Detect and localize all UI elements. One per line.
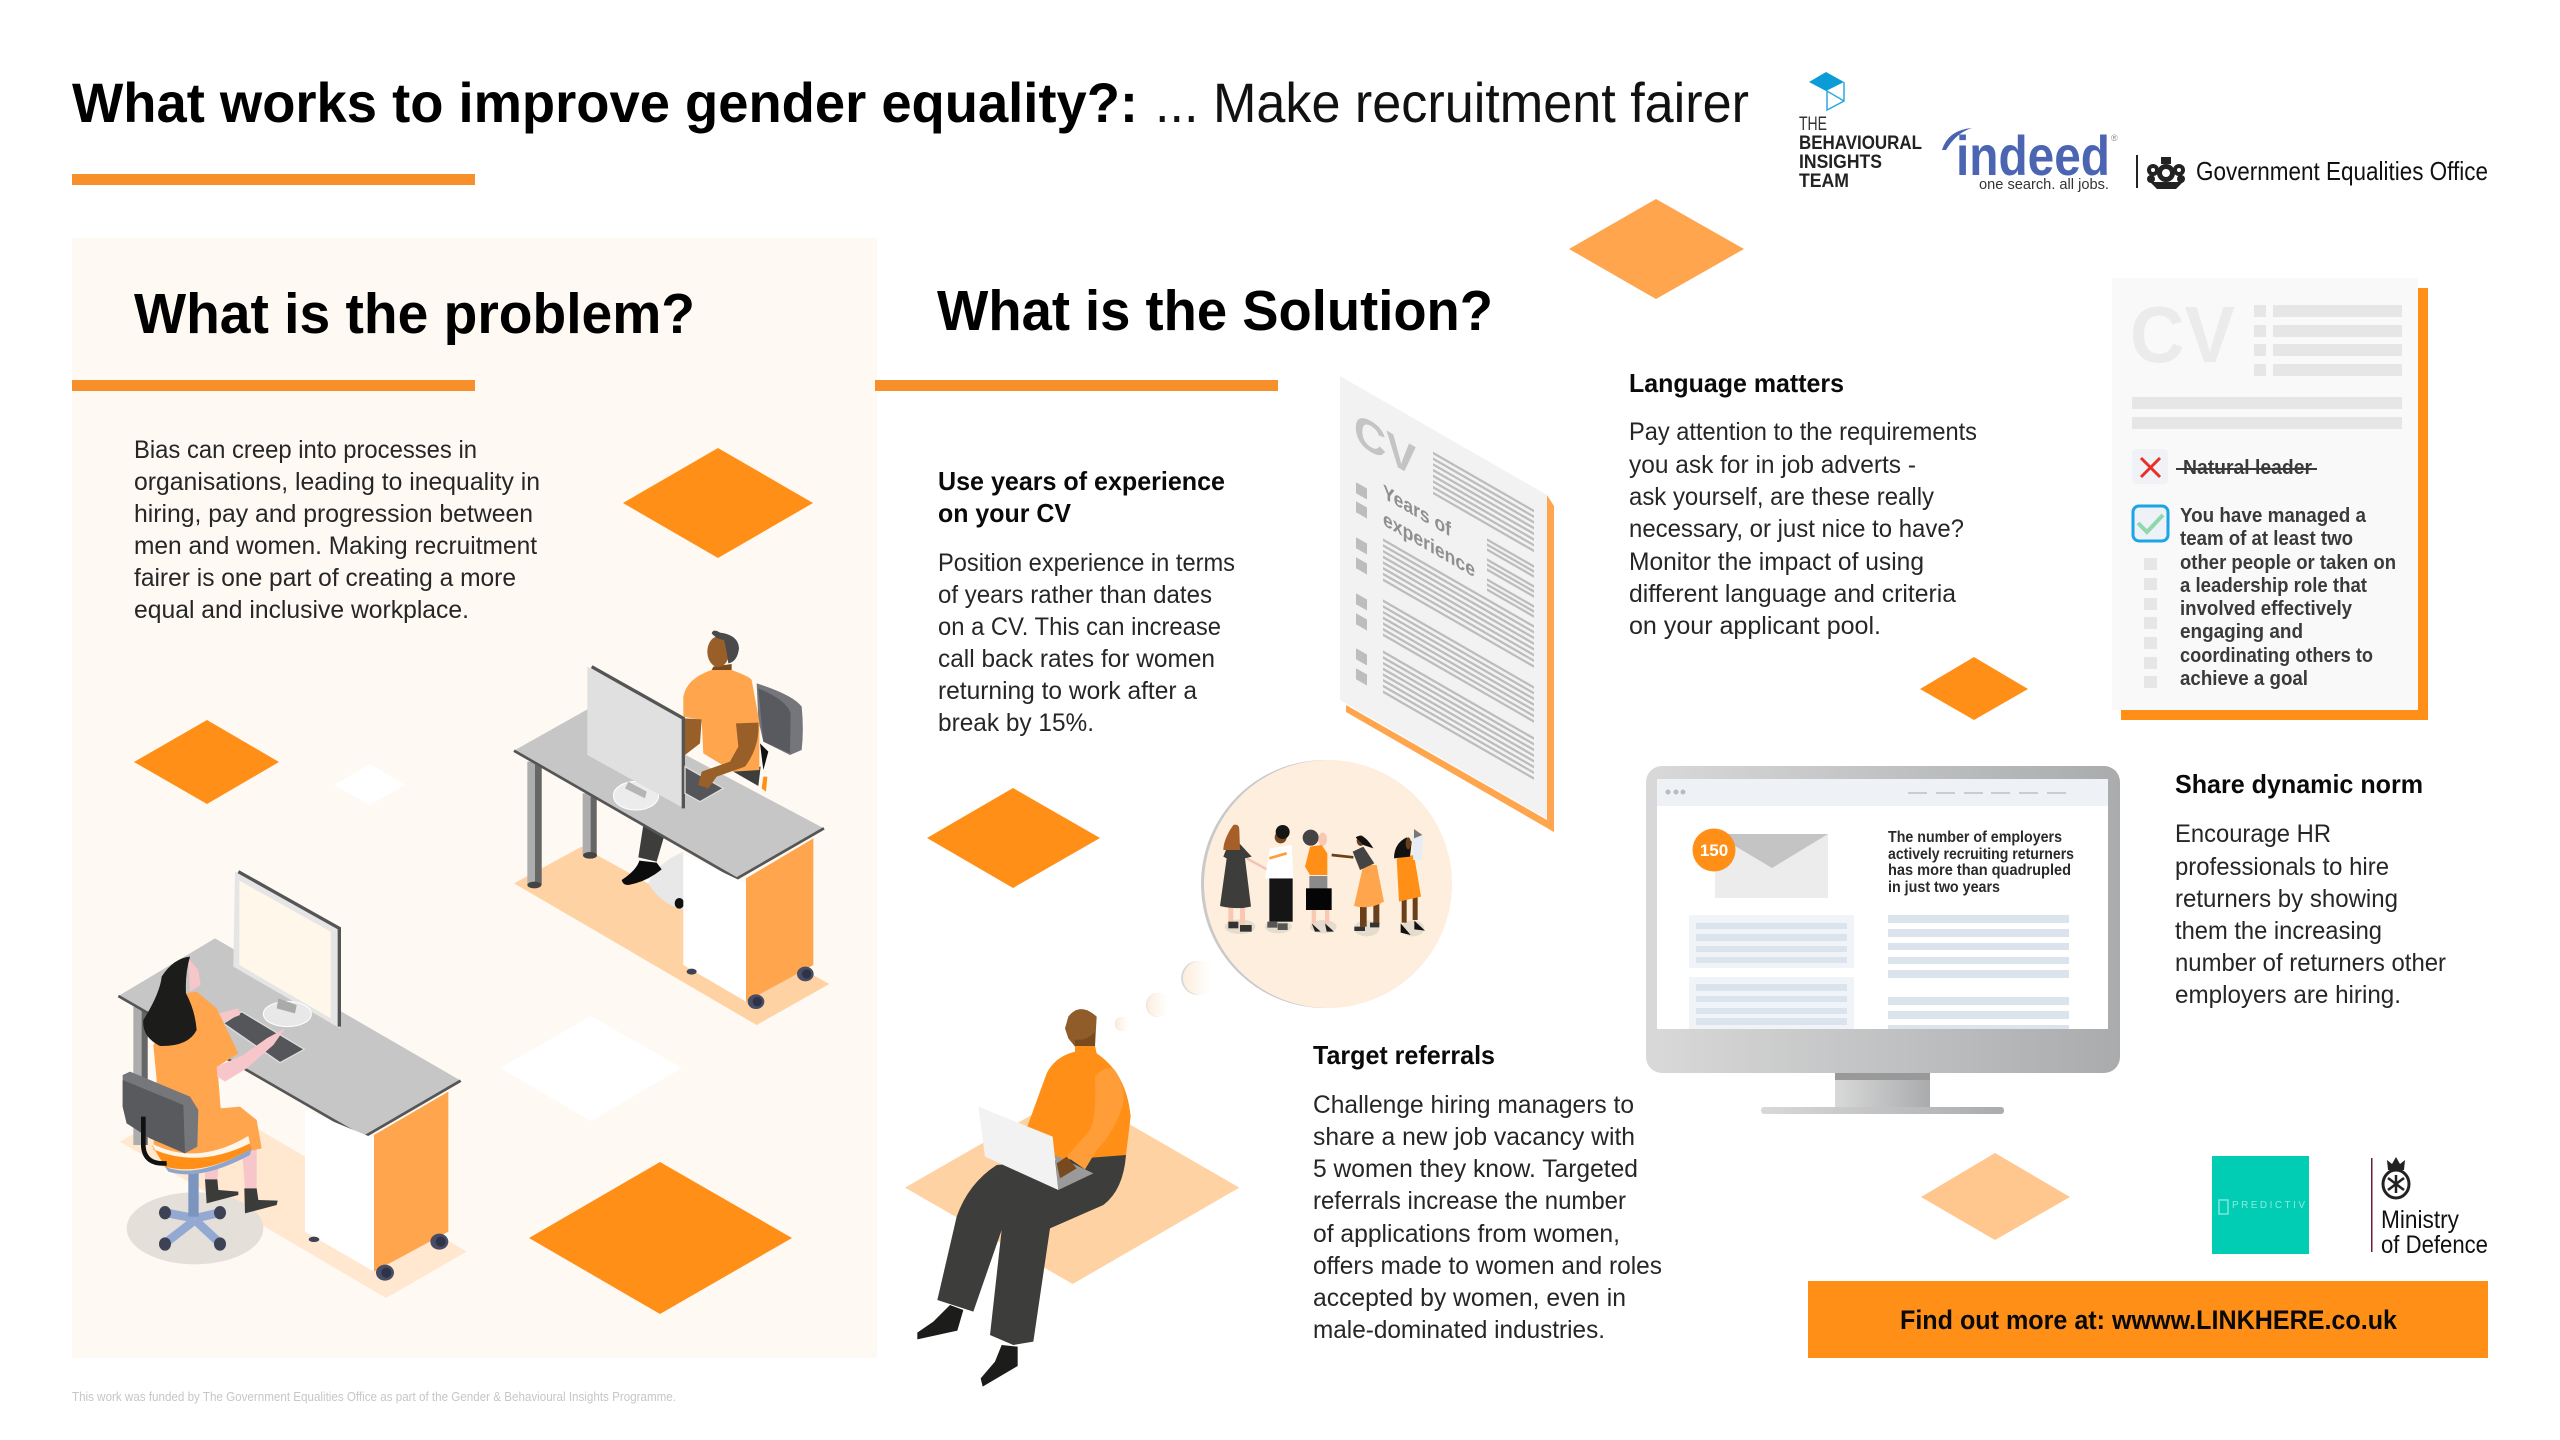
diamond: pale orange bottom [1921,1153,2070,1240]
people group [1220,825,1425,936]
text: preferred requirement: team of at least two [2180,528,2353,550]
text: preferred requirement [2180,505,2396,690]
diamond: orange top [623,448,813,558]
text: language matters [1629,368,1977,640]
logo: Ministry of Defence: Ministry [2381,1206,2459,1234]
text: preferred requirement: coordinating others to [2180,645,2373,667]
text: target referrals: share a new job vacancy with [1313,1123,1635,1151]
logo: indeed: one search. all jobs. [1979,176,2109,193]
text: employers statistic: in just two years [1888,879,2000,896]
icon: envelope with badge: 150 [1700,841,1728,860]
text: language matters: on your applicant pool. [1629,612,1881,640]
illustration: isometric CV [1340,376,1554,832]
logo: The Behavioural Insights Team [1799,72,1922,192]
text: employers statistic [1888,829,2074,896]
logo: The Behavioural Insights Team: INSIGHTS [1799,152,1882,173]
diamond: big orange [529,1162,792,1314]
logo: indeed: indeed [1956,124,2110,187]
icon: red cross [2132,449,2168,484]
text: target referrals: Target referrals [1313,1040,1495,1070]
text: language matters: you ask for in job adverts - [1629,451,1916,479]
text: language matters: Language matters [1629,368,1844,398]
text: target referrals: accepted by women, even in [1313,1284,1626,1312]
text: target referrals [1313,1040,1662,1344]
icon: green tick [2133,506,2168,541]
logo: The Behavioural Insights Team: BEHAVIOURAL [1799,133,1922,154]
logo: The Behavioural Insights Team: TEAM [1799,171,1849,192]
text: share dynamic norm [2175,769,2446,1009]
thought bubble: group of people [1201,760,1452,1008]
diamond: orange left [134,720,279,804]
text: share dynamic norm: returners by showing [2175,885,2398,913]
title: What works to improve gender equality?: [72,71,1138,134]
text: target referrals: offers made to women and roles [1313,1252,1662,1280]
text: target referrals: male-dominated industries. [1313,1316,1605,1344]
icon: envelope with badge [1692,828,1828,898]
diamond: small white [334,764,405,805]
text: employers statistic: has more than quadrupled [1888,862,2071,879]
text: preferred requirement: achieve a goal [2180,668,2308,690]
illustration: isometric CV: experience [1383,506,1475,582]
text: language matters: ask yourself, are these really [1629,483,1934,511]
text: use years of experience: of years rather than dates [938,581,1212,609]
text: employers statistic: actively recruiting returners [1888,846,2074,863]
diamond: orange top solution [1569,199,1744,299]
logo: Government Equalities Office: Government Equalities Office [2196,156,2488,186]
text: use years of experience: returning to work after a [938,677,1197,705]
text: problem description: fairer is one part of creating a more [134,564,516,592]
logo: Predictiv: PREDICTIV [2232,1200,2305,1211]
text: language matters: Pay attention to the requirements [1629,418,1977,446]
diamond: orange solution left [927,788,1100,888]
panel: what is the problem [72,238,877,1358]
text: problem description: men and women. Making recruitment [134,532,537,560]
text: language matters: different language and criteria [1629,580,1956,608]
text: share dynamic norm: professionals to hire [2175,853,2389,881]
illustration: isometric CV: Years of [1383,479,1452,542]
text: use years of experience: call back rates for women [938,645,1215,673]
text: problem description: Bias can creep into processes in [134,436,477,464]
illustration: woman at desk [118,872,467,1298]
diamond: large white [500,1016,682,1121]
heading: what is the solution: What is the Solution? [937,279,1493,343]
card: CV with requirements: CV [2130,290,2235,379]
illustration: man at desk [514,631,829,1025]
text: problem description: organisations, leading to inequality in [134,468,540,496]
logo: Ministry of Defence: of Defence [2381,1231,2488,1259]
text: use years of experience: on a CV. This can increase [938,613,1221,641]
title: ... Make recruitment fairer [1155,71,1749,134]
text: problem description: equal and inclusive workplace. [134,596,469,624]
logo: indeed: ® [2111,133,2118,143]
text: use years of experience: Use years of experience [938,466,1225,496]
logo: The Behavioural Insights Team: THE [1799,114,1827,135]
text: use years of experience [938,466,1235,737]
text: share dynamic norm: Encourage HR [2175,820,2331,848]
text: problem description: hiring, pay and progression between [134,500,533,528]
illustration: desktop monitor [1646,766,2120,1114]
text: target referrals: referrals increase the number [1313,1187,1626,1215]
text: target referrals: of applications from women, [1313,1220,1620,1248]
text: target referrals: Challenge hiring managers to [1313,1091,1634,1119]
text: language matters: Monitor the impact of using [1629,548,1924,576]
heading: problem: What is the problem? [134,282,695,346]
text: share dynamic norm: number of returners other [2175,949,2446,977]
text: problem description [134,436,540,624]
text: preferred requirement: You have managed a [2180,505,2367,527]
text: language matters: necessary, or just nice to have? [1629,515,1964,543]
call to action banner [1808,1281,2488,1358]
text: share dynamic norm: Share dynamic norm [2175,769,2423,799]
thought bubbles [1115,961,1217,1031]
logo: Government Equalities Office [2136,155,2488,189]
text: use years of experience: Position experience in terms [938,549,1235,577]
illustration: man with laptop [905,1009,1239,1387]
text: preferred requirement: involved effectively [2180,598,2353,620]
logo: Ministry of Defence [2371,1157,2488,1259]
card: CV with requirements [2112,278,2428,720]
text: natural leader struck through: Natural leader [2183,457,2312,479]
diamond: orange language [1920,657,2028,720]
call to action banner: Find out more at: wwww.LINKHERE.co.uk [1900,1305,2398,1335]
text: preferred requirement: a leadership role that [2180,575,2367,597]
text: use years of experience: break by 15%. [938,709,1094,737]
text: target referrals: 5 women they know. Targeted [1313,1155,1638,1183]
title [72,71,1749,134]
logo: Predictiv [2212,1156,2309,1254]
text: use years of experience: on your CV [938,498,1072,528]
footnote: This work was funded by The Government Equalities Office as part of the Gender & Behavioural Insights Programme. [72,1389,676,1404]
text: preferred requirement: engaging and [2180,621,2303,643]
text: share dynamic norm: employers are hiring. [2175,981,2401,1009]
illustration: isometric CV: CV [1354,403,1416,488]
text: share dynamic norm: them the increasing [2175,917,2382,945]
text: employers statistic: The number of employers [1888,829,2062,846]
text: preferred requirement: other people or taken on [2180,552,2396,574]
